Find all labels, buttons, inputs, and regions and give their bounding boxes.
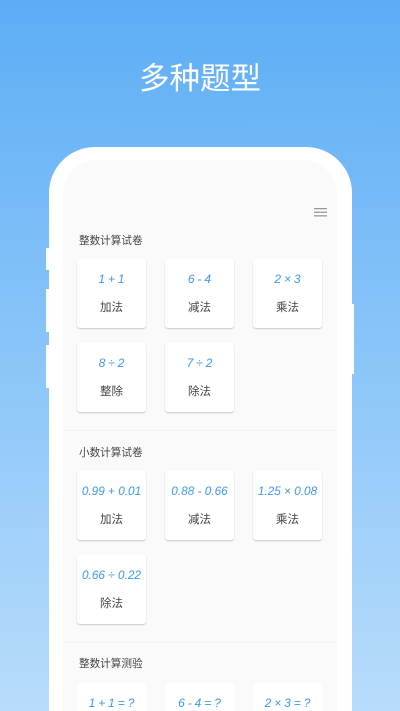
card: decimal multiplication (253, 471, 322, 540)
card: quiz addition: 1 + 1 = ? (89, 696, 134, 710)
heading: integer quiz: 整数计算测验 (79, 658, 143, 670)
card: integer multiplication: 乘法 (276, 302, 299, 314)
card: quiz multiplication: 2 × 3 = ? (265, 696, 310, 710)
card: decimal division (77, 555, 146, 624)
phone frame (49, 147, 352, 711)
card: decimal subtraction: 0.88 - 0.66 (171, 484, 228, 498)
card: decimal addition: 加法 (100, 514, 123, 526)
card: integer multiplication (253, 259, 322, 328)
card: integer exact division: 整除 (100, 386, 123, 398)
heading: integer papers: 整数计算试卷 (79, 235, 143, 247)
card: integer subtraction (165, 259, 234, 328)
card: integer subtraction: 减法 (188, 302, 211, 314)
card: integer division: 7 ÷ 2 (187, 356, 212, 370)
title: 多种题型 (139, 62, 261, 96)
card: decimal multiplication: 乘法 (276, 514, 299, 526)
card: decimal addition (77, 471, 146, 540)
card: integer addition: 1 + 1 (98, 272, 125, 286)
card: integer addition: 加法 (100, 302, 123, 314)
card: decimal addition: 0.99 + 0.01 (82, 484, 141, 498)
card: integer multiplication: 2 × 3 (274, 272, 301, 286)
card: decimal subtraction (165, 471, 234, 540)
heading: decimal papers: 小数计算试卷 (79, 447, 143, 459)
card: integer subtraction: 6 - 4 (188, 272, 211, 286)
card: quiz addition (77, 683, 146, 711)
card: quiz multiplication (253, 683, 322, 711)
card: integer addition (77, 259, 146, 328)
card: integer exact division: 8 ÷ 2 (99, 356, 124, 370)
card: integer exact division (77, 343, 146, 412)
icon: menu (314, 208, 327, 216)
card: decimal division: 除法 (100, 598, 123, 610)
card: decimal division: 0.66 ÷ 0.22 (82, 568, 141, 582)
card: integer division (165, 343, 234, 412)
card: quiz subtraction: 6 - 4 = ? (178, 696, 221, 710)
card: quiz subtraction (165, 683, 234, 711)
card: decimal subtraction: 减法 (188, 514, 211, 526)
card: integer division: 除法 (188, 386, 211, 398)
phone screen (63, 160, 337, 711)
phone side buttons (46, 248, 354, 388)
card: decimal multiplication: 1.25 × 0.08 (258, 484, 317, 498)
